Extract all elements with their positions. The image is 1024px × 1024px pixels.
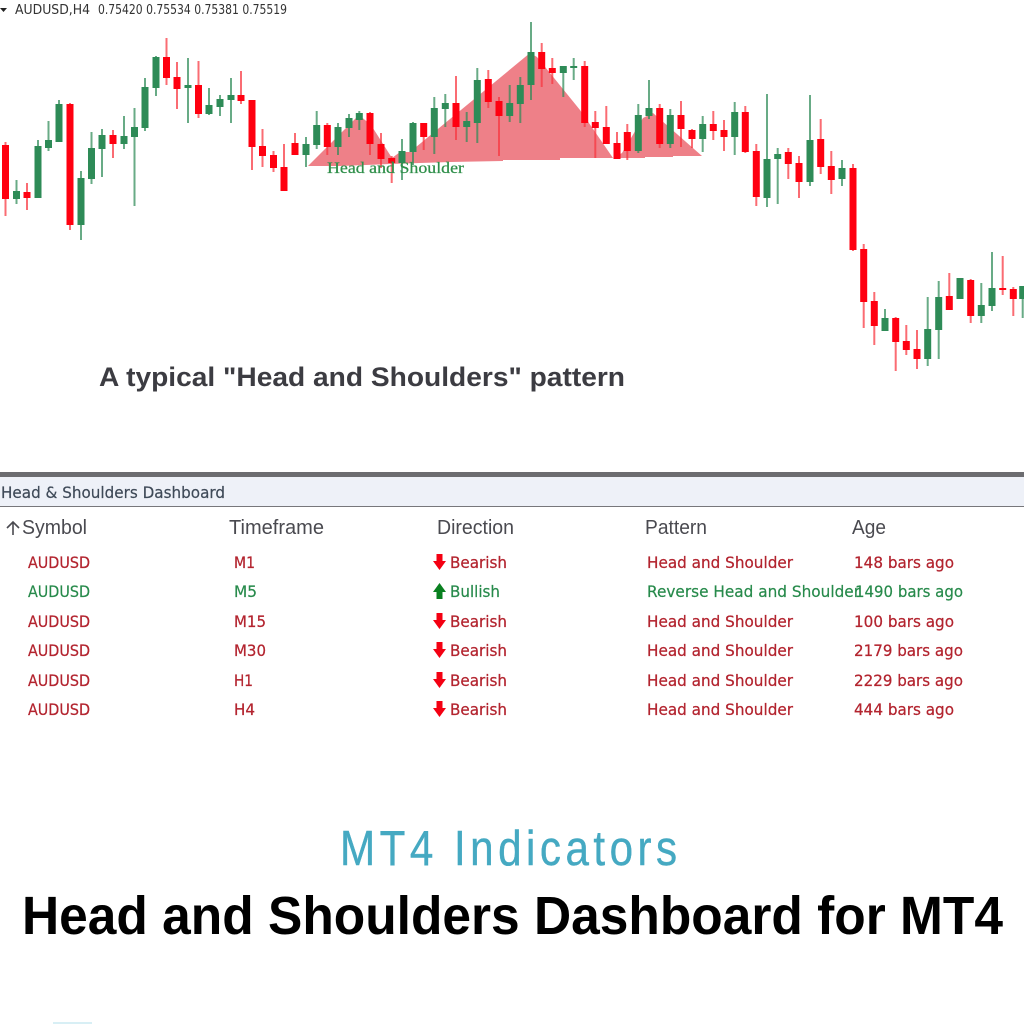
row: M30: M30 [234, 641, 266, 660]
row: H4: Bearish [450, 700, 507, 719]
chart header: symbol and prices [0, 3, 287, 18]
row: M15 [28, 612, 954, 631]
row: H4: H4 [234, 700, 255, 719]
row: M15: Head and Shoulder [647, 612, 793, 631]
row: M15: AUDUSD [28, 612, 90, 631]
table header: Symbol [22, 517, 87, 539]
panel: dashboard [0, 472, 1024, 719]
row: M1: Head and Shoulder [647, 553, 793, 572]
row: M5: Bullish [450, 582, 500, 601]
row: M15: 100 bars ago [854, 612, 954, 631]
row: M5: AUDUSD [28, 582, 90, 601]
table header: Age [852, 517, 886, 539]
main title: Head and Shoulders Dashboard for MT4 [22, 886, 1003, 946]
chart header: symbol and prices: AUDUSD,H4 [15, 3, 90, 18]
table header: Pattern [645, 517, 707, 539]
row: H1: AUDUSD [28, 671, 90, 690]
pattern highlight: head and shoulders shape [308, 53, 702, 166]
row: H4: AUDUSD [28, 700, 90, 719]
caption: a typical pattern: A typical "Head and Shoulders" pattern [99, 362, 625, 392]
dashboard title bar [0, 472, 1024, 507]
row: H4: Head and Shoulder [647, 700, 793, 719]
row: M30: 2179 bars ago [854, 641, 963, 660]
row: M15: M15 [234, 612, 266, 631]
row: H1 [28, 671, 963, 690]
row: M5: Reverse Head and Shoulder [647, 582, 860, 601]
row: H4 [28, 700, 954, 719]
row: H1: Head and Shoulder [647, 671, 793, 690]
row: M5 [28, 582, 963, 601]
row: H1: H1 [234, 671, 253, 690]
row: M1: Bearish [450, 553, 507, 572]
row: M30 [28, 641, 963, 660]
row: M5: 1490 bars ago [855, 582, 963, 601]
row: M1: 148 bars ago [854, 553, 954, 572]
row: H1: Bearish [450, 671, 507, 690]
table header: Direction [437, 517, 514, 539]
chart label: Head and Shoulder: Head and Shoulder [327, 160, 465, 177]
row: H1: 2229 bars ago [854, 671, 963, 690]
row: M1 [28, 553, 954, 572]
row: M1: AUDUSD [28, 553, 90, 572]
row: M30: Bearish [450, 641, 507, 660]
row: M15: Bearish [450, 612, 507, 631]
table header [7, 517, 886, 539]
table header: Timeframe [229, 517, 324, 539]
row: M30: AUDUSD [28, 641, 90, 660]
row: M1: M1 [234, 553, 255, 572]
row: M5: M5 [234, 582, 257, 601]
brand heading: MT4 Indicators: MT4 Indicators [340, 821, 677, 876]
row: M30: Head and Shoulder [647, 641, 793, 660]
chart header: symbol and prices: 0.75420 0.75534 0.75381 0.75519 [98, 3, 287, 18]
candlestick chart [6, 22, 1023, 371]
row: H4: 444 bars ago [854, 700, 954, 719]
dashboard title bar: Head & Shoulders Dashboard [1, 483, 225, 502]
